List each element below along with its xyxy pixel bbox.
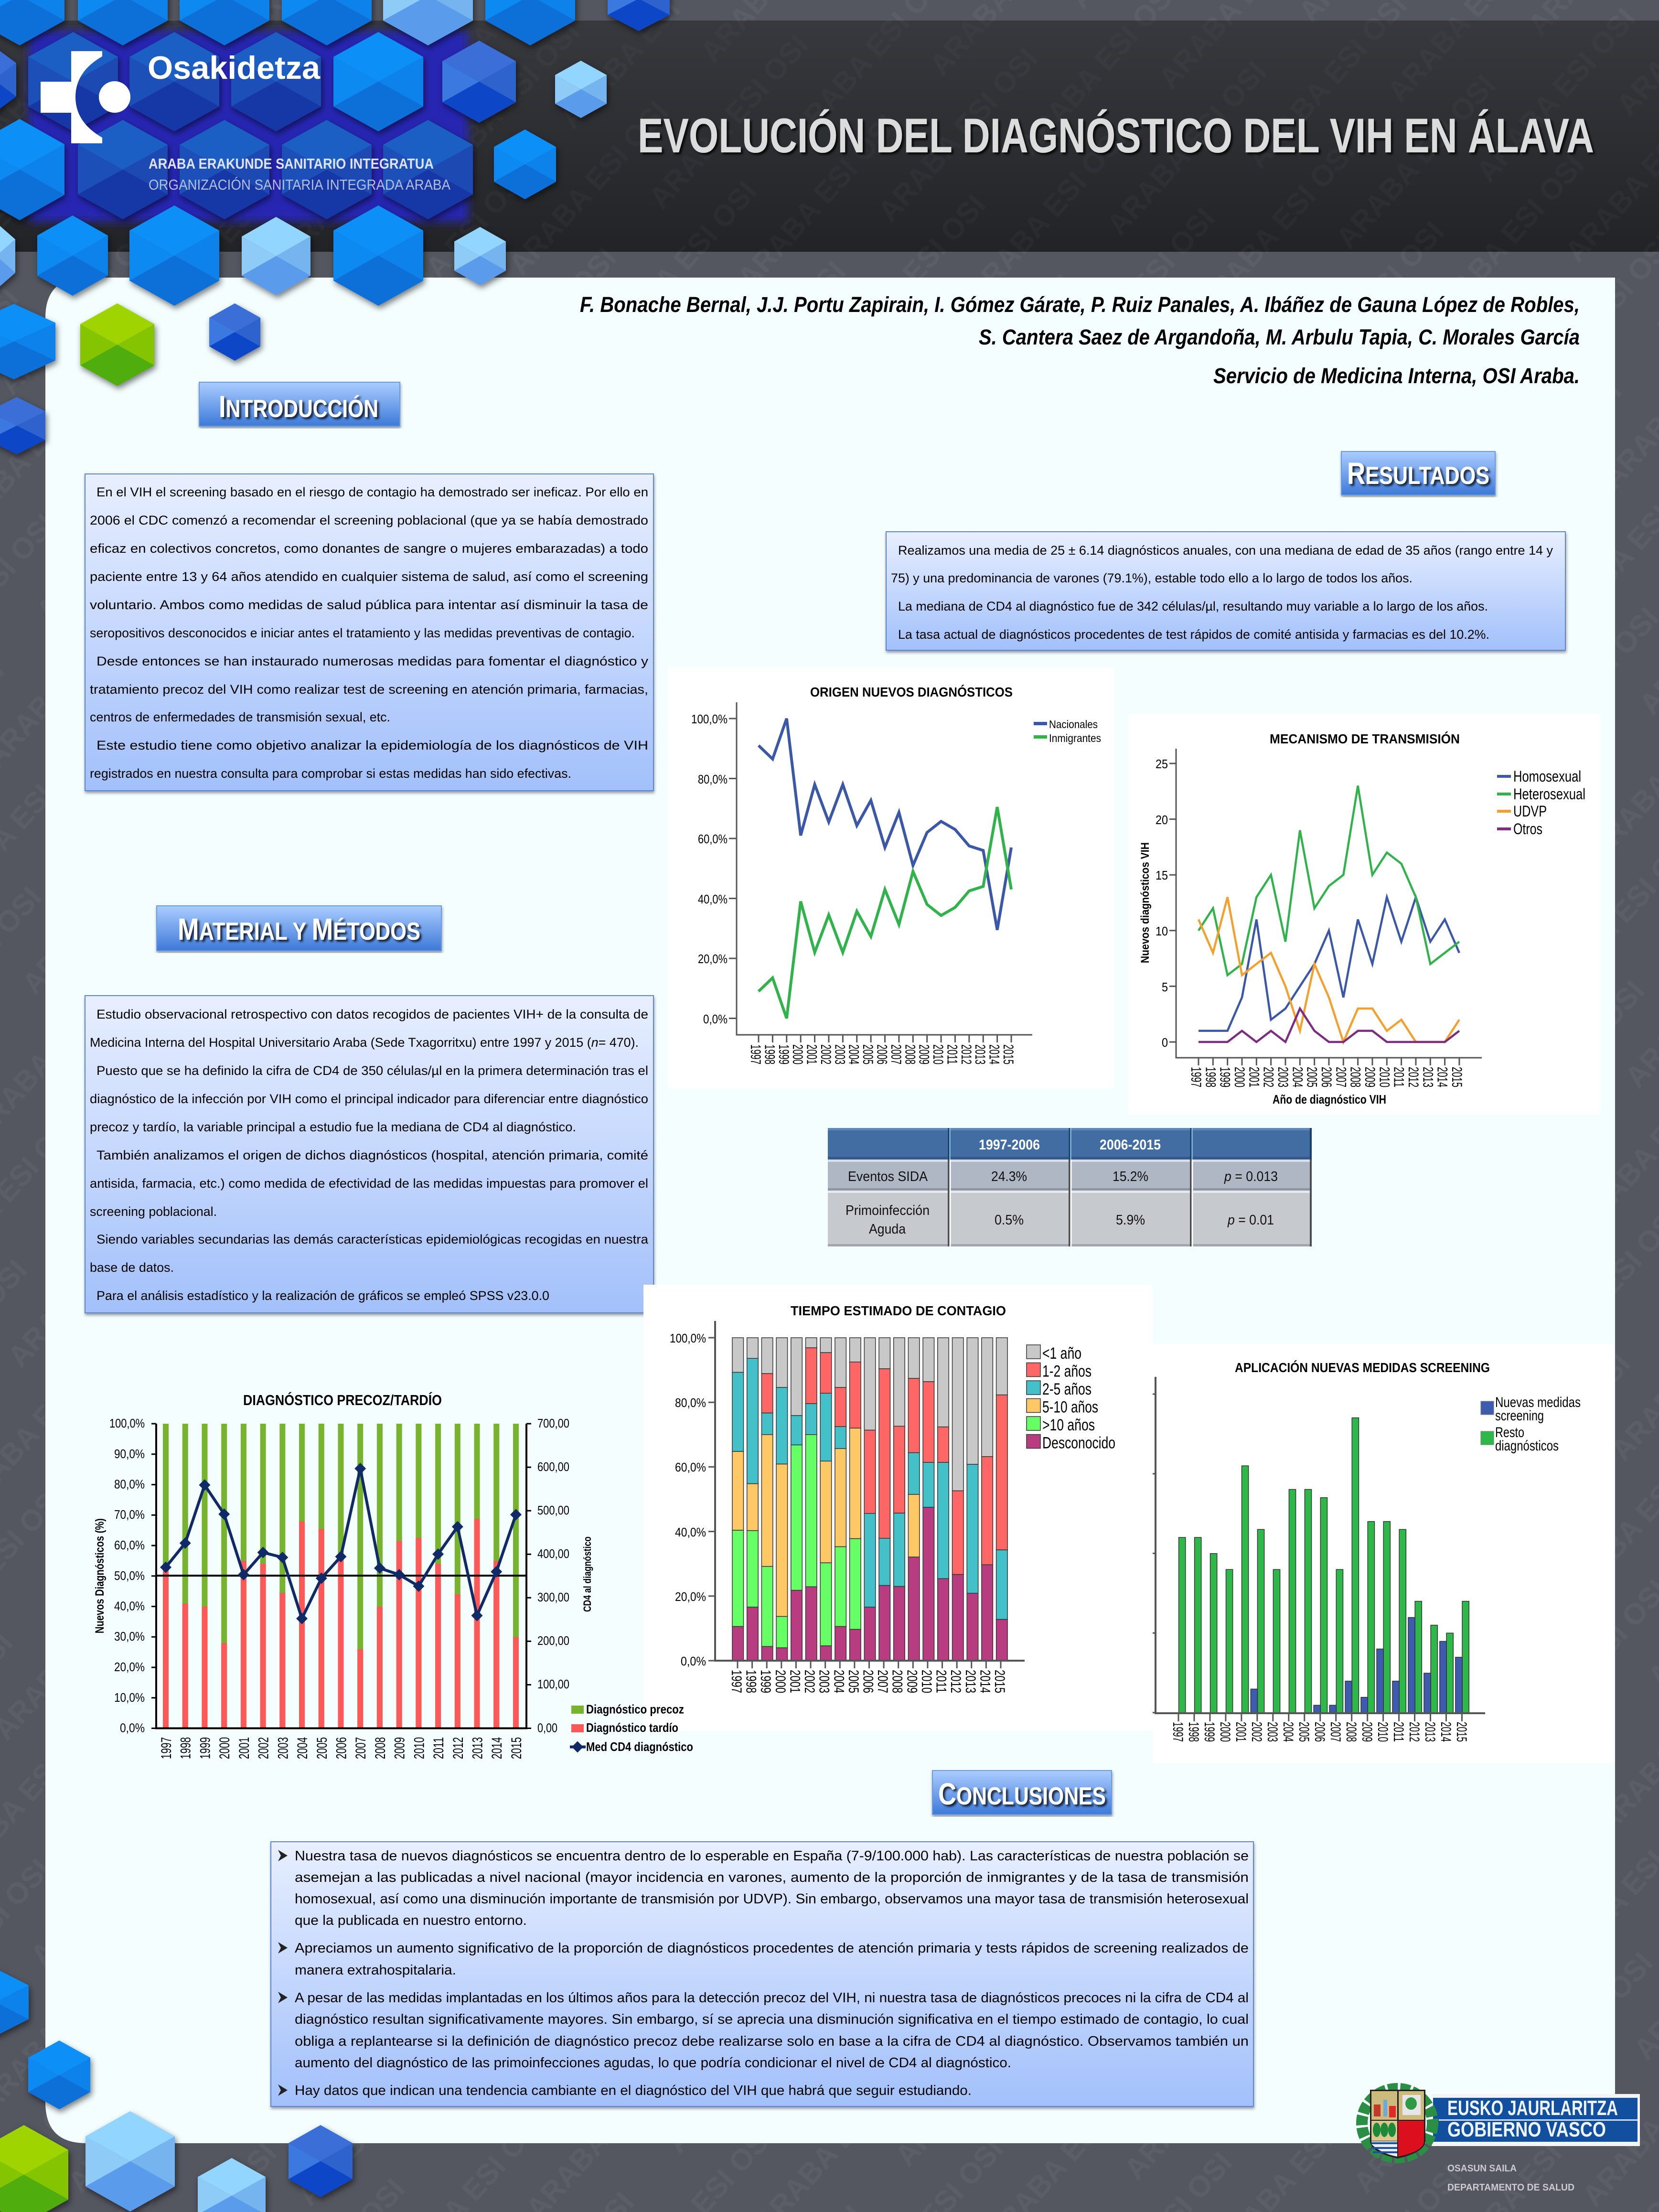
- text block: introducción: Desde entonces se han instaurado numerosas medidas para fomentar el diagnóstico y: [96, 654, 649, 668]
- x axis labels: 2004: [295, 1737, 310, 1759]
- right axis labels: 0,00: [537, 1721, 557, 1735]
- legend: [1034, 718, 1101, 744]
- x axis labels: 2006: [1318, 1067, 1334, 1087]
- chart title: ORIGEN NUEVOS DIAGNÓSTICOS: [810, 685, 1013, 699]
- text block: resultados: La mediana de CD4 al diagnóstico fue de 342 células/µl, resultando muy variable a lo largo de los años.: [898, 599, 1488, 613]
- legend: Otros: [1513, 820, 1542, 838]
- legend: Nuevas medidas: [1495, 1395, 1581, 1410]
- x axis labels: 2000: [217, 1737, 233, 1759]
- x axis labels: 1998: [1202, 1067, 1218, 1087]
- x axis labels: 1997: [1188, 1067, 1204, 1087]
- x axis labels: 2001: [1233, 1722, 1249, 1742]
- right axis labels: 600,00: [537, 1460, 569, 1474]
- text block: introducción: seropositivos desconocidos e iniciar antes el tratamiento y las medidas preventivas de contagio.: [90, 626, 635, 640]
- y axis labels: 20: [1156, 813, 1168, 827]
- hexagon cluster: top left: [0, 0, 670, 454]
- x axis labels: 2013: [963, 1670, 978, 1693]
- x axis labels: 1997: [1170, 1722, 1186, 1742]
- x axis labels: 2014: [1434, 1067, 1450, 1087]
- x axis labels: 2013: [470, 1737, 485, 1759]
- left axis labels: 30,0%: [114, 1629, 145, 1643]
- text block: material y métodos: También analizamos el origen de dichos diagnósticos (hospital, atención primaria, comité: [96, 1148, 648, 1162]
- conclusion lines: Nuestra tasa de nuevos diagnósticos se encuentra dentro de lo esperable en España (7-9/100.000 hab). Las características de nuestra población se: [295, 1848, 1249, 1864]
- stacked bars: [163, 1424, 519, 1729]
- x axis labels: 2007: [875, 1670, 890, 1693]
- y axis labels: 5: [1162, 980, 1168, 994]
- x axis labels: 2007: [1327, 1722, 1343, 1742]
- y axis labels: 80,0%: [675, 1396, 706, 1410]
- table row: Primoinfección Aguda: [828, 1191, 1312, 1246]
- x axis title: Año de diagnóstico VIH: [1273, 1092, 1386, 1106]
- y axis labels: 60,0%: [698, 832, 728, 846]
- left axis labels: 10,0%: [114, 1690, 145, 1705]
- x axis labels: 2010: [930, 1044, 946, 1064]
- x axis labels: 2013: [1422, 1722, 1438, 1742]
- x axis labels: 2008: [889, 1670, 905, 1693]
- text block: introducción: [85, 474, 653, 791]
- table row: Primoinfección Aguda: Aguda: [869, 1222, 906, 1237]
- x axis labels: 2002: [818, 1044, 834, 1064]
- heading: Resultados: RESULTADOS: [1347, 456, 1489, 491]
- department name: [1447, 2163, 1574, 2193]
- content panel: [45, 278, 1615, 2143]
- text block: resultados: 75) y una predominancia de varones (79.1%), estable todo ello a lo largo de todos los años.: [891, 571, 1413, 585]
- x axis labels: 2014: [986, 1044, 1002, 1064]
- legend: diagnósticos: [1495, 1438, 1559, 1454]
- authors: S. Cantera Saez de Argandoña, M. Arbulu Tapia, C. Morales García: [979, 325, 1580, 349]
- organisation name spanish: ORGANIZACIÓN SANITARIA INTEGRADA ARABA: [149, 176, 450, 193]
- x axis labels: [159, 1737, 524, 1759]
- table: eventos SIDA y primoinfección: [828, 1128, 1312, 1246]
- x axis labels: 2005: [846, 1670, 861, 1693]
- conclusion lines: manera extrahospitalaria.: [295, 1963, 456, 1978]
- y axis labels: 20,0%: [675, 1589, 706, 1604]
- series lines: [759, 719, 1011, 1019]
- text block: material y métodos: base de datos.: [90, 1260, 174, 1275]
- x axis labels: 2002: [802, 1670, 817, 1693]
- icon: coat of arms: [1362, 2089, 1433, 2158]
- x axis labels: 2008: [373, 1737, 388, 1759]
- authors: [580, 292, 1580, 388]
- threshold line: [156, 1575, 526, 1577]
- text block: introducción: Este estudio tiene como objetivo analizar la epidemiología de los diagnósticos de VIH: [96, 738, 648, 752]
- y axis labels: [1156, 757, 1168, 1050]
- conclusion lines: que la publicada en nuestro entorno.: [295, 1913, 527, 1928]
- logo: Eusko Jaurlaritza: [1362, 2089, 1640, 2193]
- text block: introducción: 2006 el CDC comenzó a recomendar el screening poblacional (que ya se había demostrado: [90, 513, 648, 527]
- x axis labels: 1997: [159, 1737, 174, 1759]
- x axis labels: 1999: [776, 1044, 792, 1064]
- x axis labels: 1998: [761, 1044, 777, 1064]
- left axis labels: [109, 1416, 145, 1735]
- left axis labels: 40,0%: [114, 1599, 145, 1613]
- heading: Resultados: [1341, 451, 1495, 495]
- x axis labels: 1999: [1201, 1722, 1217, 1742]
- x axis labels: 1998: [743, 1670, 759, 1693]
- table row: Primoinfección Aguda: 5.9%: [1116, 1213, 1145, 1228]
- text block: material y métodos: antisida, farmacia, etc.) como medida de efectividad de las medidas impuestas para promover el: [90, 1176, 648, 1191]
- hexagon cluster: bottom left: [0, 1968, 353, 2212]
- stacked bars: [732, 1338, 1007, 1661]
- text block: resultados: Realizamos una media de 25 ± 6.14 diagnósticos anuales, con una mediana de edad de 35 años (rango entre 14 y: [898, 543, 1553, 558]
- x axis labels: 2009: [1362, 1067, 1378, 1087]
- x axis labels: 2012: [1405, 1067, 1421, 1087]
- x axis labels: 1999: [197, 1737, 213, 1759]
- conclusion lines: Apreciamos un aumento significativo de la proporción de diagnósticos procedentes de atención primaria y tests rápidos de screening realizados de: [295, 1941, 1249, 1956]
- axes: [1176, 749, 1482, 1058]
- x axis labels: 2011: [1391, 1722, 1406, 1742]
- y axis labels: 0,0%: [703, 1012, 728, 1026]
- organisation name basque: ARABA ERAKUNDE SANITARIO INTEGRATUA: [149, 155, 434, 172]
- x axis labels: 2005: [1304, 1067, 1320, 1087]
- x axis labels: 2006: [1312, 1722, 1327, 1742]
- y axis title: Nuevos diagnósticos VIH: [1139, 842, 1152, 963]
- text block: introducción: En el VIH el screening basado en el riesgo de contagio ha demostrado ser ineficaz. Por ello en: [96, 485, 648, 499]
- text block: material y métodos: diagnóstico de la infección por VIH como el principal indicador para diferenciar entre diagnóstico: [90, 1092, 648, 1106]
- text block: introducción: centros de enfermedades de transmisión sexual, etc.: [90, 710, 390, 724]
- department name: OSASUN SAILA: [1447, 2163, 1517, 2174]
- legend: <1 año: [1042, 1344, 1081, 1363]
- CD4 line: [160, 1463, 522, 1624]
- table row: Eventos SIDA: [828, 1160, 1312, 1191]
- left axis labels: 90,0%: [114, 1447, 145, 1461]
- text block: material y métodos: Medicina Interna del Hospital Universitario Araba (Sede Txagorritxu) entre 1997 y 2015 (n= 470).: [90, 1035, 639, 1050]
- x axis labels: 2001: [1246, 1067, 1262, 1087]
- axes: [737, 702, 1032, 1035]
- x axis labels: 1999: [1217, 1067, 1233, 1087]
- logo banner: GOBIERNO VASCO: [1447, 2118, 1606, 2141]
- x axis labels: 2003: [1264, 1722, 1280, 1742]
- x axis labels: 2014: [489, 1737, 505, 1759]
- x axis labels: 2004: [846, 1044, 862, 1064]
- text block: introducción: voluntario. Ambos como medidas de salud pública para intentar así disminuir la tasa de: [90, 598, 648, 612]
- x axis labels: 2006: [333, 1737, 350, 1759]
- bullet arrows: [278, 1850, 288, 2096]
- text block: introducción: tratamiento precoz del VIH como realizar test de screening en atención primaria, farmacias,: [90, 682, 648, 697]
- chart title: MECANISMO DE TRANSMISIÓN: [1270, 731, 1460, 746]
- x axis labels: 2009: [904, 1670, 920, 1693]
- x axis labels: 2010: [411, 1737, 427, 1759]
- x axis labels: 2011: [431, 1737, 447, 1759]
- legend: Heterosexual: [1513, 785, 1585, 803]
- x axis labels: 2015: [1454, 1722, 1469, 1742]
- x axis labels: 2001: [787, 1670, 803, 1693]
- y axis labels: 40,0%: [675, 1525, 706, 1539]
- chart: tiempo estimado de contagio: [643, 1285, 1153, 1730]
- text block: material y métodos: screening poblacional.: [90, 1204, 217, 1219]
- x axis labels: 2001: [236, 1737, 252, 1759]
- chart title: APLICACIÓN NUEVAS MEDIDAS SCREENING: [1235, 1360, 1490, 1375]
- x axis labels: 2010: [919, 1670, 934, 1693]
- axes: [715, 1321, 1025, 1661]
- text block: material y métodos: Para el análisis estadístico y la realización de gráficos se empleó SPSS v23.0.0: [96, 1289, 549, 1303]
- chart: aplicación nuevas medidas screening: [1153, 1344, 1614, 1763]
- legend: Homosexual: [1513, 768, 1581, 785]
- right axis labels: [537, 1416, 569, 1735]
- legend: Inmigrantes: [1049, 732, 1101, 744]
- text block: material y métodos: Estudio observacional retrospectivo con datos recogidos de pacientes VIH+ de la consulta de: [96, 1007, 648, 1021]
- conclusion lines: asemejan a las publicadas a nivel nacional (mayor incidencia en varones, aumento de la proporción de inmigrantes y de la tasa de transmisión: [295, 1870, 1249, 1885]
- conclusion lines: homosexual, así como una disminución importante de transmisión por UDVP). Sin embargo, observamos una mayor tasa de transmisión heterosexual: [295, 1891, 1249, 1907]
- x axis labels: 2009: [916, 1044, 932, 1064]
- x axis labels: 2012: [948, 1670, 963, 1693]
- x axis labels: 2011: [933, 1670, 949, 1693]
- right axis labels: 500,00: [537, 1503, 569, 1517]
- x axis labels: 2012: [1406, 1722, 1422, 1742]
- x axis labels: 2012: [958, 1044, 974, 1064]
- y axis labels: 10: [1156, 924, 1168, 938]
- logo backdrop: [29, 31, 468, 222]
- x axis labels: 2010: [1375, 1722, 1391, 1742]
- left axis labels: 100,0%: [109, 1416, 145, 1430]
- x axis labels: 2000: [1217, 1722, 1233, 1742]
- legend: Diagnóstico tardío: [586, 1720, 678, 1735]
- x axis labels: 2007: [353, 1737, 369, 1759]
- x axis labels: 2002: [256, 1737, 272, 1759]
- y axis labels: 60,0%: [675, 1460, 706, 1474]
- legend: Desconocido: [1042, 1434, 1115, 1452]
- x axis labels: 2005: [314, 1737, 330, 1759]
- x axis labels: 2007: [888, 1044, 904, 1064]
- legend: >10 años: [1042, 1416, 1095, 1434]
- conclusion lines: [295, 1848, 1249, 2098]
- text block: material y métodos: precoz y tardío, la variable principal a estudio fue la mediana de CD4 al diagnóstico.: [90, 1120, 576, 1134]
- heading: Introducción: INTRODUCCIÓN: [219, 389, 378, 424]
- x axis labels: [728, 1670, 1007, 1693]
- x axis labels: 2010: [1376, 1067, 1392, 1087]
- logo: Osakidetza: [41, 50, 450, 193]
- x axis labels: [1170, 1722, 1469, 1742]
- y axis labels: 25: [1156, 757, 1168, 771]
- conclusion lines: A pesar de las medidas implantadas en los últimos años para la detección precoz del VIH, ni nuestra tasa de diagnósticos precoces ni la cifra de CD4 al: [295, 1990, 1249, 2006]
- x axis labels: 2004: [831, 1670, 846, 1693]
- text block: material y métodos: [85, 996, 653, 1313]
- legend: [1497, 768, 1585, 838]
- table row: Primoinfección Aguda: p = 0.01: [1227, 1213, 1274, 1228]
- y axis labels: 100,0%: [691, 712, 728, 726]
- x axis labels: 2003: [275, 1737, 291, 1759]
- left axis labels: 80,0%: [114, 1477, 145, 1492]
- y axis labels: 80,0%: [698, 772, 728, 786]
- left axis labels: 20,0%: [114, 1660, 145, 1674]
- x axis labels: 2014: [1438, 1722, 1454, 1742]
- authors: Servicio de Medicina Interna, OSI Araba.: [1213, 364, 1580, 388]
- left axis labels: 50,0%: [114, 1568, 145, 1583]
- header band: [0, 21, 1659, 252]
- conclusion lines: Hay datos que indican una tendencia cambiante en el diagnóstico del VIH que habrá que seguir estudiando.: [295, 2083, 972, 2098]
- bars: [1179, 1418, 1469, 1713]
- axes: [1156, 1377, 1485, 1713]
- y axis labels: [670, 1331, 706, 1668]
- table row: Primoinfección Aguda: Primoinfección: [846, 1203, 930, 1218]
- x axis labels: 2003: [816, 1670, 832, 1693]
- x axis labels: 2000: [772, 1670, 788, 1693]
- x axis labels: 2002: [1261, 1067, 1276, 1087]
- x axis labels: 2004: [1289, 1067, 1305, 1087]
- conclusion lines: obliga a replantearse si la definición de diagnóstico precoz debe realizarse solo en base a la cifra de CD4 al diagnóstico. Observamos también un: [295, 2034, 1249, 2049]
- x axis labels: 1999: [758, 1670, 773, 1693]
- table header: [828, 1128, 1312, 1160]
- legend: 5-10 años: [1042, 1398, 1098, 1416]
- chart: diagnóstico precoz/tardío: [93, 1391, 693, 1759]
- chart: mecanismo de transmisión: [1128, 714, 1601, 1115]
- legend: 2-5 años: [1042, 1380, 1092, 1398]
- x axis labels: 2000: [790, 1044, 805, 1064]
- x axis labels: 2015: [509, 1737, 524, 1759]
- legend: Nacionales: [1049, 718, 1098, 730]
- right axis labels: 700,00: [537, 1416, 569, 1430]
- table row: Eventos SIDA: 24.3%: [991, 1169, 1027, 1184]
- chart: origen nuevos diagnósticos: [668, 667, 1114, 1089]
- right axis title: CD4 al diagnóstico: [581, 1536, 593, 1612]
- legend: Diagnóstico precoz: [586, 1702, 684, 1716]
- text block: introducción: paciente entre 13 y 64 años atendido en cualquier sistema de salud, así como el screening: [90, 569, 648, 584]
- x axis labels: 2013: [1420, 1067, 1435, 1087]
- heading: Introducción: [199, 382, 400, 426]
- x axis labels: 2008: [1343, 1722, 1359, 1742]
- legend: UDVP: [1513, 803, 1547, 820]
- y axis labels: 100,0%: [670, 1331, 706, 1345]
- x axis labels: [1188, 1067, 1465, 1087]
- heading: Material y Métodos: [157, 906, 441, 951]
- right axis labels: 100,00: [537, 1677, 569, 1691]
- x axis labels: 2004: [1280, 1722, 1296, 1742]
- heading: Conclusiones: CONCLUSIONES: [938, 1777, 1106, 1811]
- x axis labels: [748, 1044, 1016, 1064]
- right axis labels: 400,00: [537, 1546, 569, 1561]
- x axis labels: 2002: [1249, 1722, 1264, 1742]
- conclusion lines: diagnóstico resultan significativamente mayores. Sin embargo, sí se aprecia una disminución significativa en el tiempo estimado de contagio, lo cual: [295, 2012, 1249, 2027]
- x axis labels: 2015: [1000, 1044, 1016, 1064]
- chart title: DIAGNÓSTICO PRECOZ/TARDÍO: [243, 1391, 442, 1408]
- legend: screening: [1495, 1408, 1544, 1424]
- left axis title: Nuevos Diagnósticos (%): [93, 1518, 107, 1633]
- heading: Material y Métodos: MATERIAL Y MÉTODOS: [178, 912, 420, 946]
- legend: [1027, 1344, 1115, 1452]
- x axis labels: 2005: [1296, 1722, 1312, 1742]
- text block: resultados: [886, 532, 1565, 650]
- x axis labels: 2005: [860, 1044, 876, 1064]
- legend: [1481, 1395, 1581, 1454]
- x axis labels: 2006: [860, 1670, 876, 1693]
- x axis labels: 2006: [874, 1044, 889, 1064]
- heading: Conclusiones: [932, 1771, 1112, 1815]
- y axis labels: 0,0%: [681, 1654, 706, 1668]
- x axis labels: 2008: [1348, 1067, 1363, 1087]
- y axis labels: 0: [1162, 1035, 1168, 1050]
- x axis labels: 2001: [804, 1044, 820, 1064]
- x axis labels: 2015: [1449, 1067, 1465, 1087]
- right axis labels: 200,00: [537, 1633, 569, 1648]
- logo wordmark: Osakidetza: [148, 50, 321, 86]
- x axis labels: 2014: [977, 1670, 993, 1693]
- icon: Osakidetza cross: [41, 51, 130, 143]
- y axis labels: 15: [1156, 868, 1168, 882]
- table header: 2006-2015: [1100, 1137, 1161, 1153]
- left axis labels: 70,0%: [114, 1507, 145, 1522]
- text block: conclusiones: [271, 1842, 1253, 2106]
- text block: material y métodos: Siendo variables secundarias las demás características epidemiológicas recogidas en nuestra: [96, 1232, 649, 1246]
- x axis labels: 2003: [832, 1044, 847, 1064]
- conclusion lines: aumento del diagnóstico de las primoinfecciones agudas, lo que podría condicionar el nivel de CD4 al diagnóstico.: [295, 2055, 1011, 2071]
- y axis labels: [691, 712, 728, 1026]
- x axis labels: 1997: [748, 1044, 763, 1064]
- logo banner: [1432, 2094, 1640, 2146]
- x axis labels: 2003: [1275, 1067, 1291, 1087]
- right axis labels: 300,00: [537, 1590, 569, 1604]
- x axis labels: 1998: [1186, 1722, 1201, 1742]
- series lines: [1199, 786, 1459, 1042]
- table row: Eventos SIDA: p = 0.013: [1224, 1169, 1278, 1184]
- left axis labels: 0,0%: [120, 1721, 145, 1735]
- y axis labels: 20,0%: [698, 952, 728, 966]
- x axis labels: 2007: [1333, 1067, 1349, 1087]
- x axis labels: 2008: [902, 1044, 918, 1064]
- x axis labels: 1998: [178, 1737, 194, 1759]
- text block: resultados: La tasa actual de diagnósticos procedentes de test rápidos de comité antisida y farmacias es del 10.2%.: [898, 627, 1489, 642]
- left axis labels: 60,0%: [114, 1538, 145, 1552]
- legend: Resto: [1495, 1425, 1524, 1440]
- department name: DEPARTAMENTO DE SALUD: [1447, 2182, 1574, 2193]
- x axis labels: 2015: [992, 1670, 1007, 1693]
- table row: Eventos SIDA: Eventos SIDA: [848, 1169, 928, 1184]
- text block: introducción: registrados en nuestra consulta para comprobar si estas medidas han sido efectivas.: [90, 766, 571, 781]
- legend: [570, 1702, 693, 1754]
- x axis labels: 2009: [1359, 1722, 1375, 1742]
- x axis labels: 2000: [1231, 1067, 1247, 1087]
- x axis labels: 2013: [972, 1044, 988, 1064]
- x axis labels: 2012: [450, 1737, 466, 1759]
- text block: material y métodos: Puesto que se ha definido la cifra de CD4 de 350 células/µl en la primera determinación tras el: [96, 1063, 648, 1078]
- table header: 1997-2006: [979, 1137, 1040, 1153]
- axes: [156, 1424, 526, 1729]
- x axis labels: 2011: [944, 1044, 960, 1064]
- chart title: TIEMPO ESTIMADO DE CONTAGIO: [791, 1303, 1006, 1318]
- x axis labels: 2009: [392, 1737, 408, 1759]
- table row: Eventos SIDA: 15.2%: [1113, 1169, 1148, 1184]
- legend: Med CD4 diagnóstico: [586, 1740, 693, 1754]
- legend: 1-2 años: [1042, 1363, 1092, 1381]
- x axis labels: 2011: [1391, 1067, 1407, 1087]
- table row: Primoinfección Aguda: 0.5%: [995, 1213, 1024, 1228]
- y axis labels: 40,0%: [698, 892, 728, 906]
- x axis labels: 1997: [728, 1670, 744, 1693]
- text block: introducción: eficaz en colectivos concretos, como donantes de sangre o mujeres embarazadas) a todo: [90, 541, 648, 556]
